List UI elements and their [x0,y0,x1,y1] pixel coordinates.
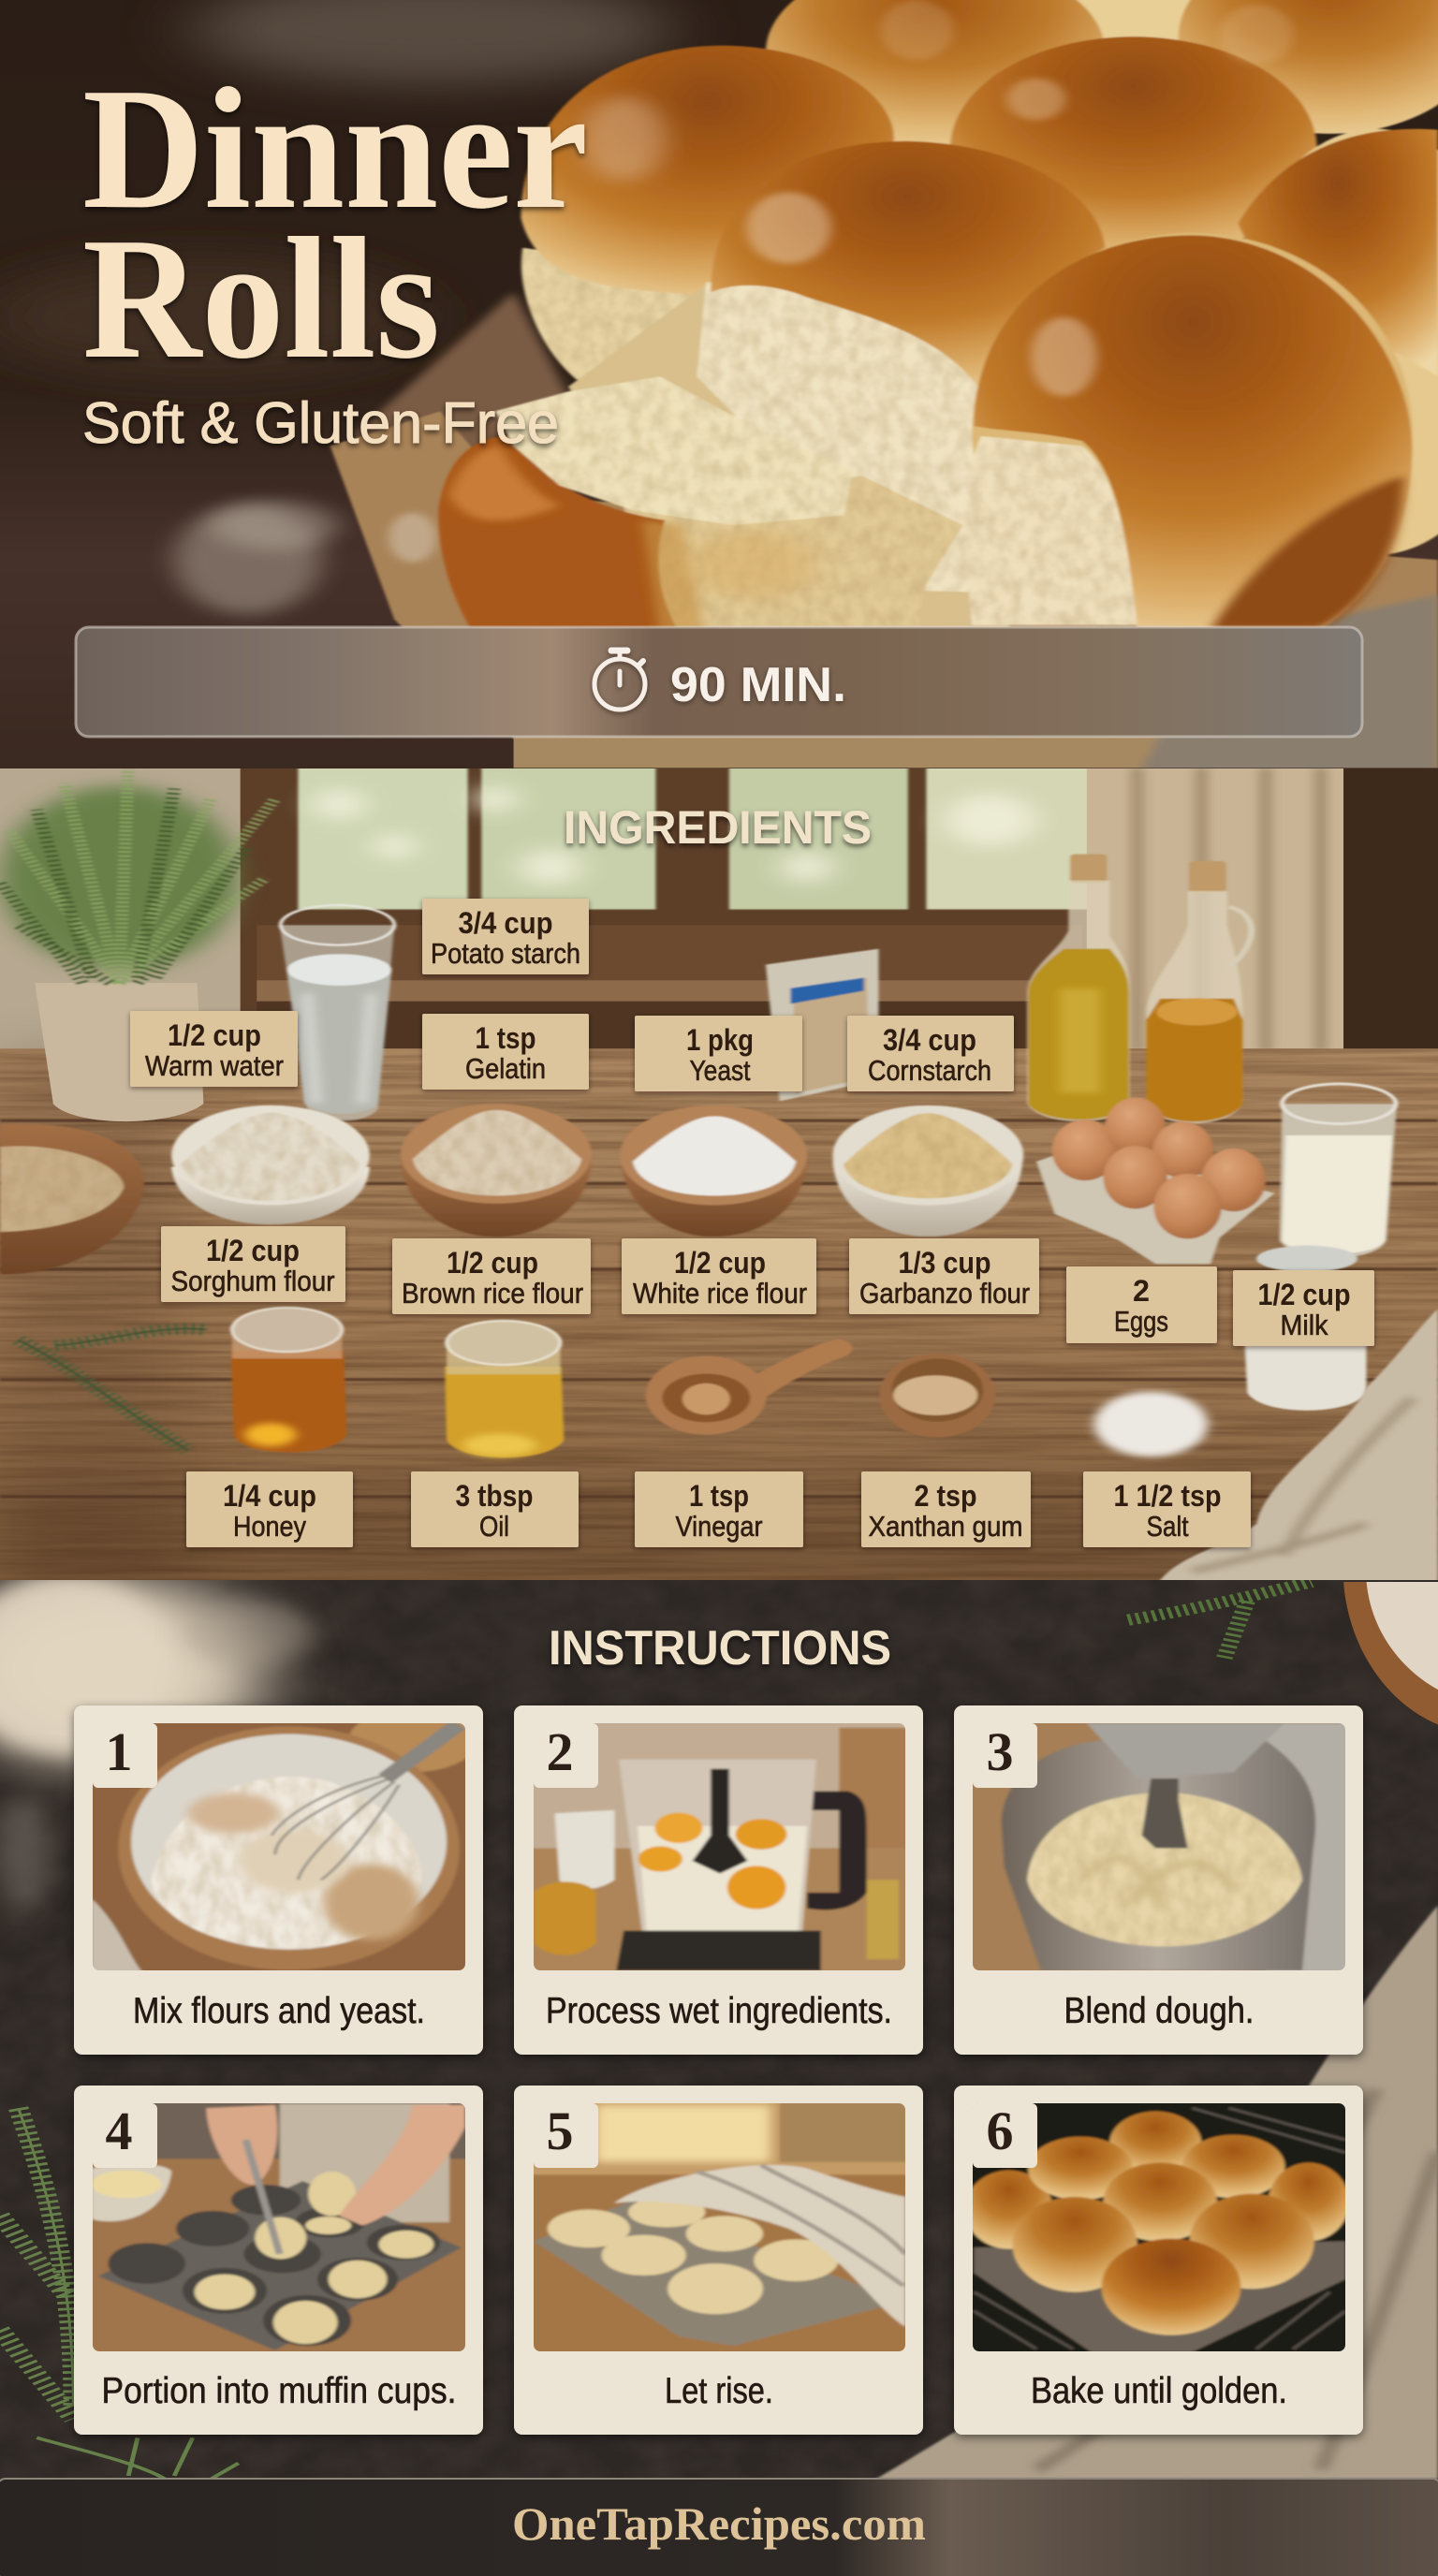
step number: 4 [105,2100,133,2161]
label: white rice flour: White rice flour [633,1277,807,1310]
label: eggs [1066,1266,1217,1343]
step number: 5 [547,2100,573,2161]
label: vinegar [635,1471,803,1547]
caption: Let rise. [665,2371,773,2411]
subtitle: Soft & Gluten-Free [82,391,559,456]
caption: Process wet ingredients. [546,1991,892,2031]
number tab [534,2103,598,2168]
water glass [280,905,394,1120]
caption: Mix flours and yeast. [133,1991,425,2031]
rosemary sprig [19,1328,206,1451]
icon: stopwatch [594,651,645,710]
salt pile [1094,1392,1208,1456]
honey jar [231,1351,346,1453]
label: honey: 1/4 cup [223,1479,316,1513]
number tab [973,1723,1037,1788]
caption: Portion into muffin cups. [101,2371,457,2411]
footer [0,2479,1438,2576]
curtains [0,768,241,1051]
xanthan bowl [879,1354,995,1438]
pot and plant [35,983,203,1121]
heading: ingredients: INGREDIENTS [564,801,872,854]
label: vinegar: Vinegar [676,1510,762,1543]
label: oil: 3 tbsp [455,1479,534,1513]
oil jar [445,1367,564,1457]
label: eggs: 2 [1133,1274,1150,1308]
time bar [76,627,1362,737]
yeast packet [766,949,878,1101]
milk glass [1280,1084,1397,1258]
label: potato starch [422,899,589,974]
label: vinegar: 1 tsp [689,1479,749,1513]
photo: baked golden rolls [965,2099,1353,2359]
label: sorghum flour: Sorghum flour [170,1265,335,1297]
title: Dinner Rolls: Rolls [82,202,440,395]
bowl: sorghum [171,1167,370,1224]
vinegar spoon [752,1339,853,1400]
caption: Bake until golden. [1031,2371,1287,2411]
back rolls [1075,0,1193,41]
label: oil: Oil [479,1510,509,1543]
step number: 1 [105,1721,133,1782]
background: dark slate with flour and linen [0,1575,1438,2576]
small milk jar [1244,1340,1367,1411]
front left roll [658,476,964,625]
step card 6 [954,2086,1363,2435]
front right roll [970,233,1413,532]
heading: instructions: INSTRUCTIONS [549,1621,891,1676]
title: Dinner Rolls [84,86,588,363]
title: Dinner Rolls: Dinner [82,52,588,245]
label: white rice flour [622,1238,816,1314]
label: xanthan gum: Xanthan gum [869,1510,1022,1543]
label: garbanzo flour: Garbanzo flour [859,1277,1030,1310]
label: xanthan gum [861,1471,1031,1547]
label: white rice flour: 1/2 cup [674,1246,766,1280]
rosemary bottom left [0,2108,239,2479]
bowl: brown rice [401,1159,592,1237]
label: oil [411,1471,579,1547]
photo: food processor [527,1719,913,1975]
window panes [298,768,1092,910]
oil bottles [1027,855,1252,1123]
rosemary top right [1128,1582,1312,1658]
label: potato starch: Potato starch [431,937,580,970]
photo: dough rising under towel [527,2099,913,2359]
centre torn roll [696,282,979,593]
photo: dinner rolls on parchment [0,0,1438,777]
panel: ingredients [0,768,1438,1587]
step card 4 [74,2086,483,2435]
label: salt: Salt [1146,1510,1189,1543]
photo: rustic table scene [0,768,1438,1587]
label: milk: 1/2 cup [1258,1278,1350,1311]
label: warm water [130,1011,298,1087]
label: cornstarch: Cornstarch [868,1054,991,1087]
photo: portioning into muffin tin [87,2099,472,2359]
bread base fill [568,277,1027,629]
number tab [93,2103,157,2168]
label: salt [1083,1471,1251,1547]
step number: 3 [987,1721,1013,1782]
label: yeast: 1 pkg [686,1023,754,1057]
photo: whisking flours [87,1708,477,1975]
panel: instructions [0,1575,1438,2576]
step card 1 [74,1705,483,2055]
eggs in carton [1036,1097,1275,1264]
label: brown rice flour: Brown rice flour [402,1277,583,1310]
label: milk [1233,1270,1374,1346]
bowl top right [1343,1582,1438,1724]
caption: Blend dough. [1064,1991,1255,2031]
label: eggs: Eggs [1114,1305,1168,1338]
step number: 6 [987,2100,1013,2161]
label: gelatin: Gelatin [465,1052,546,1085]
label: garbanzo flour [849,1238,1039,1314]
label: yeast [635,1016,802,1091]
step card 3 [954,1705,1363,2055]
time text: 90 MIN. [670,658,846,712]
label: honey: Honey [233,1510,306,1543]
website: OneTapRecipes.com [512,2497,926,2550]
bowl: white rice [621,1159,807,1237]
bowl: garbanzo [832,1159,1022,1237]
label: garbanzo flour: 1/3 cup [899,1246,990,1280]
label: sorghum flour: 1/2 cup [206,1234,300,1267]
label: salt: 1 1/2 tsp [1114,1479,1221,1513]
table [0,1048,1438,1587]
label: brown rice flour [392,1238,591,1314]
step number: 2 [547,1721,573,1782]
label: honey [186,1471,353,1547]
number tab [973,2103,1037,2168]
step card 2 [514,1705,923,2055]
label: milk: Milk [1281,1309,1328,1341]
label: gelatin [422,1014,589,1090]
label: xanthan gum: 2 tsp [914,1479,977,1513]
label: cornstarch: 3/4 cup [883,1023,976,1057]
label: brown rice flour: 1/2 cup [447,1246,538,1280]
label: warm water: 1/2 cup [168,1018,261,1052]
label: sorghum flour [161,1226,345,1302]
far-left bowl [0,1104,1367,1457]
panel: hero [0,0,1438,777]
label: yeast: Yeast [689,1054,751,1087]
step card 5 [514,2086,923,2435]
label: potato starch: 3/4 cup [459,906,552,940]
number tab [534,1723,598,1788]
linen cloth [1155,1309,1438,1587]
number tab [93,1723,157,1788]
label: warm water: Warm water [145,1049,284,1082]
photo: stand mixer [967,1719,1353,1977]
label: cornstarch [847,1016,1014,1091]
label: gelatin: 1 tsp [476,1021,536,1055]
